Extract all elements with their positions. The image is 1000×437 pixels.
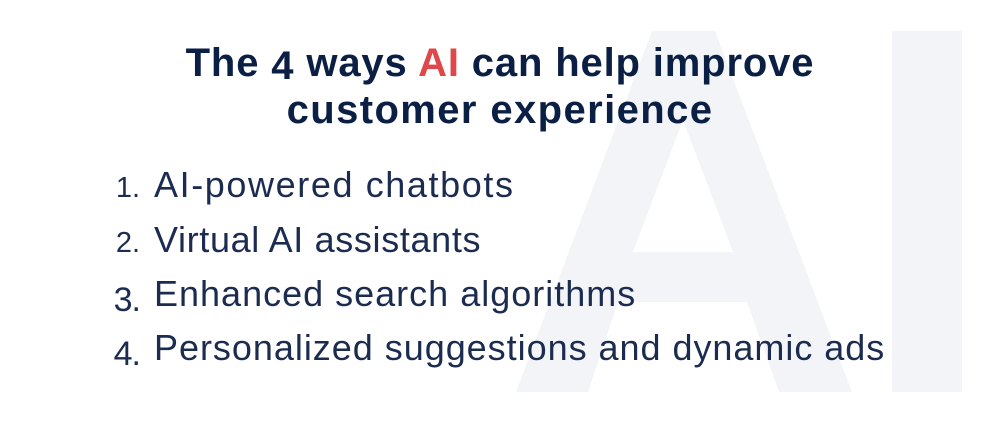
list item 3: 3. xyxy=(114,281,140,319)
title line 2: customer experience xyxy=(287,88,713,132)
list item 1: AI-powered chatbots xyxy=(154,164,515,205)
list item 2: Virtual AI assistants xyxy=(154,219,481,260)
list item 1: 1. xyxy=(116,172,140,204)
list item 3: Enhanced search algorithms xyxy=(154,273,636,314)
list item 2: 2. xyxy=(116,227,140,259)
list item 4: Personalized suggestions and dynamic ads xyxy=(154,327,885,368)
title line 1: The 4 ways AI can help improve xyxy=(186,40,814,88)
list item 4: 4. xyxy=(114,335,140,373)
